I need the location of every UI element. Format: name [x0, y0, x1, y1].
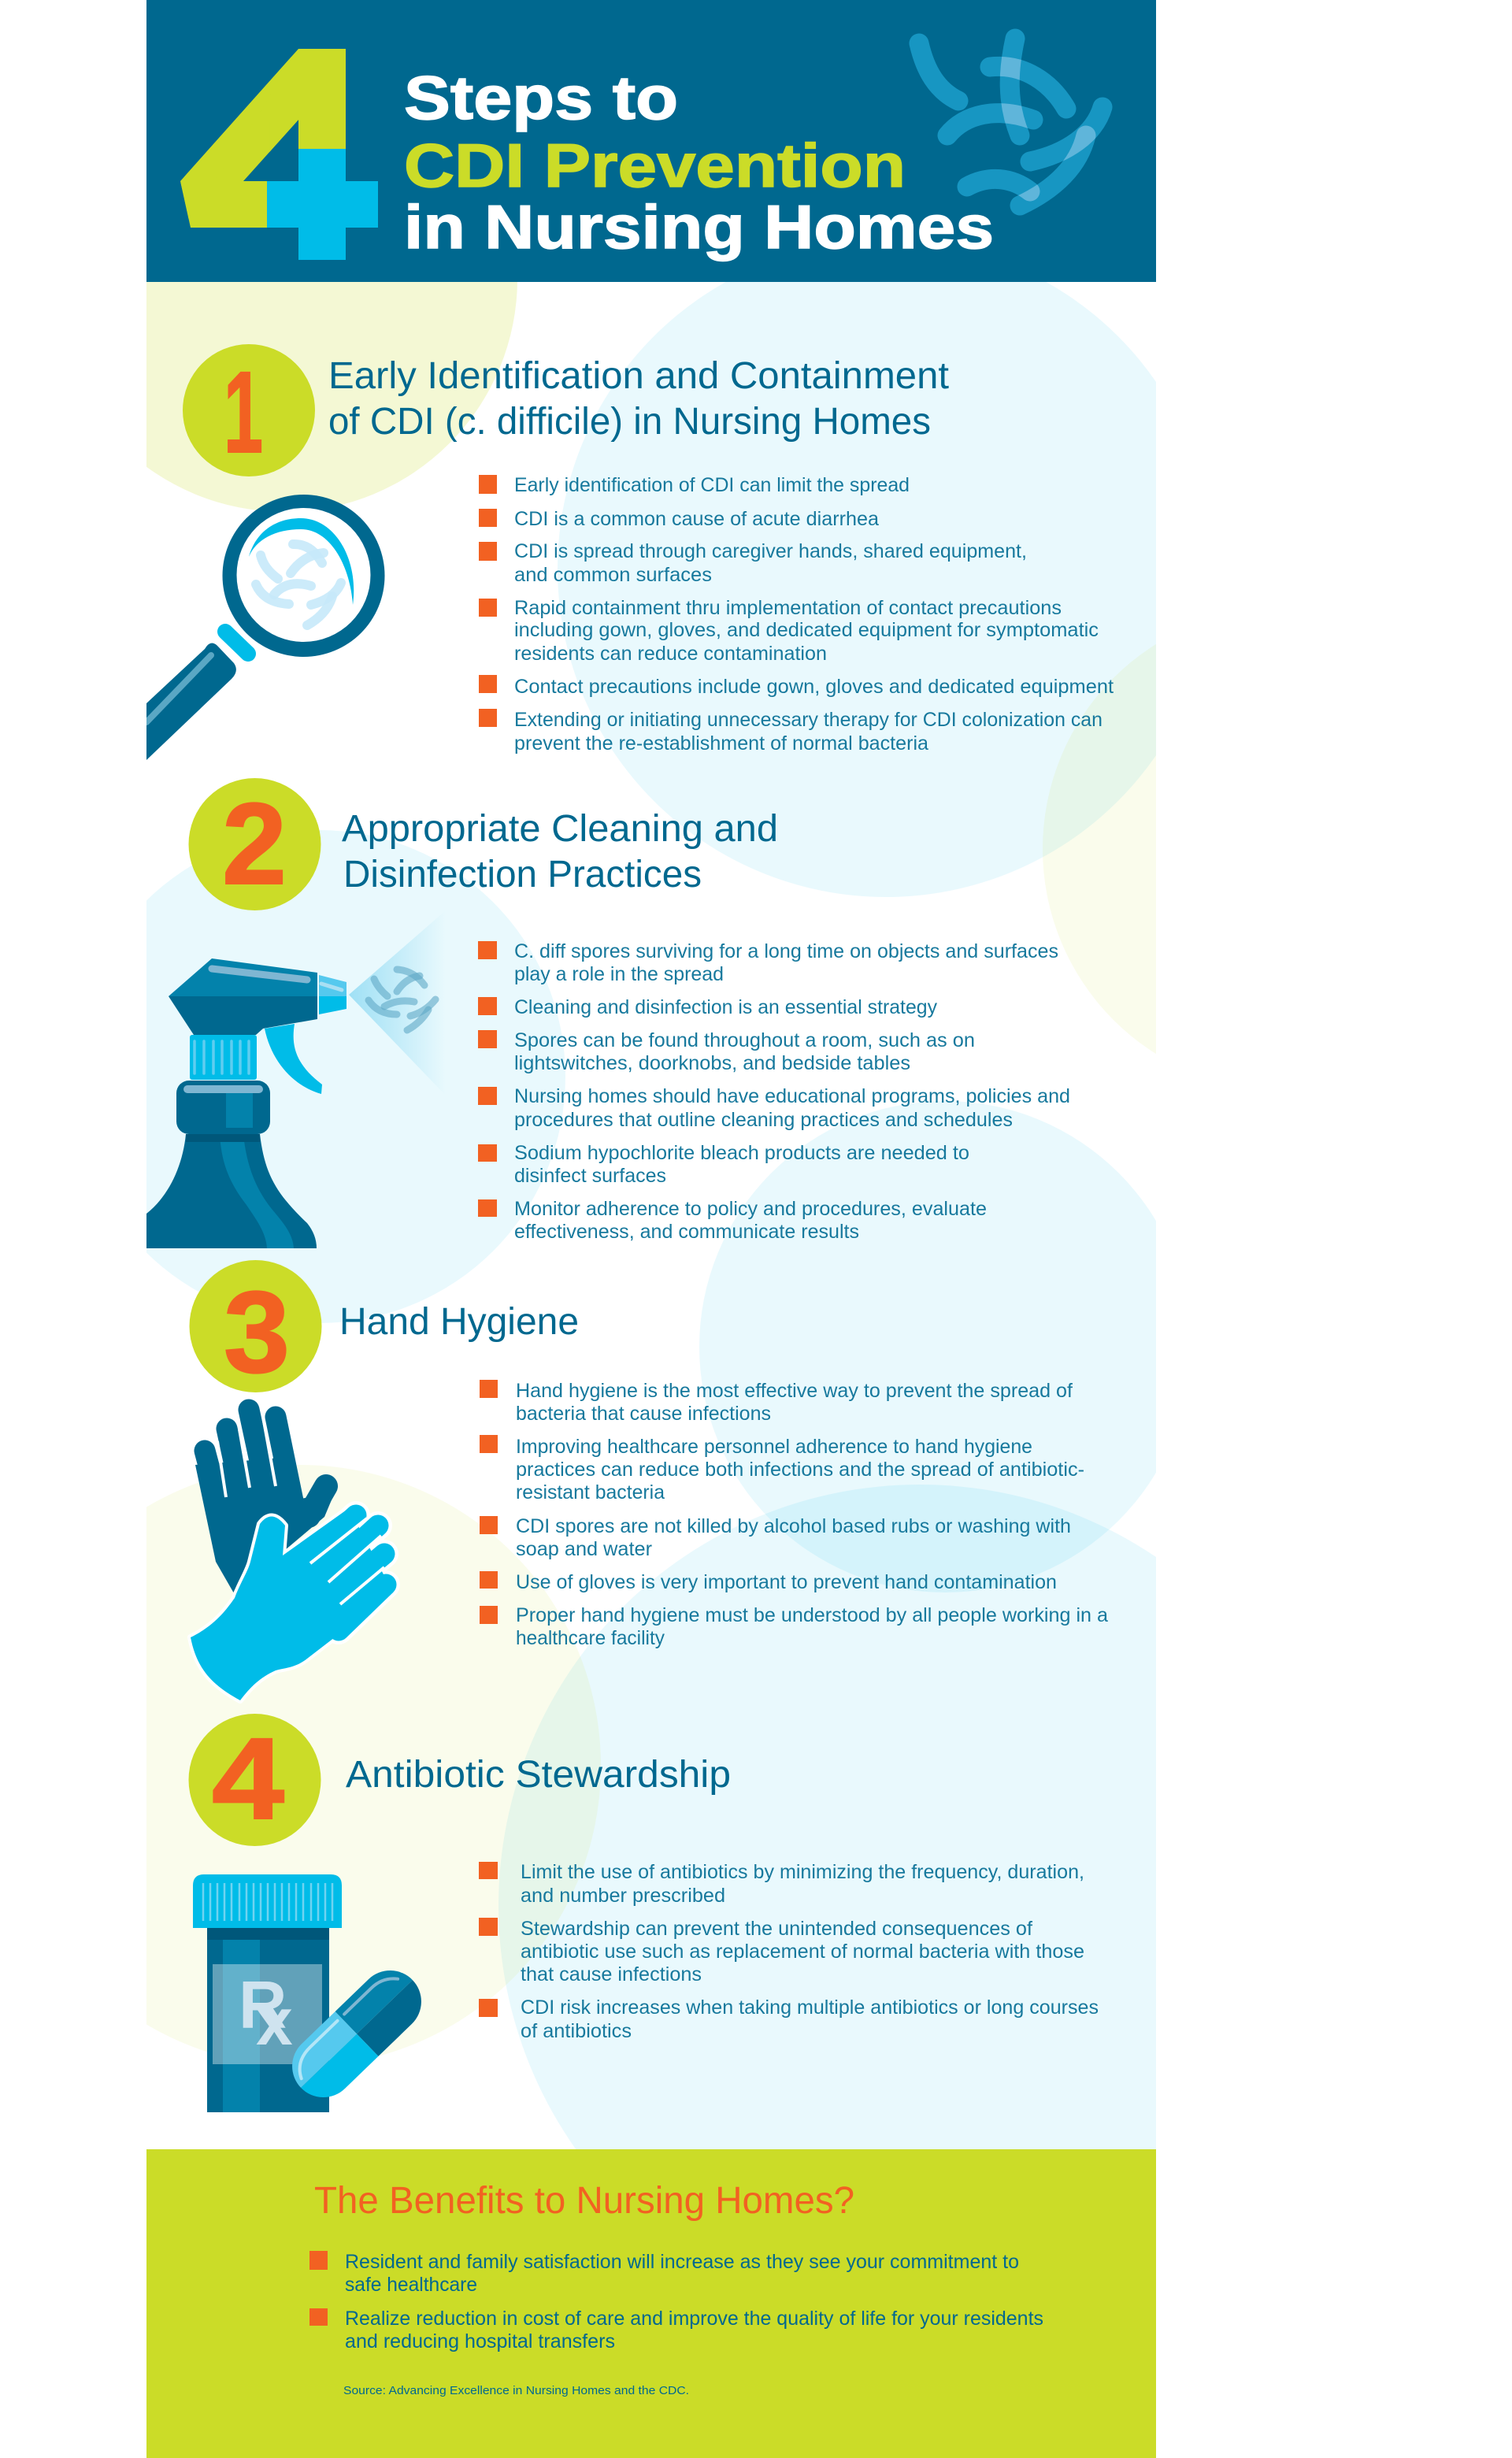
title: Steps to [404, 63, 678, 132]
section 2 [146, 778, 1070, 1248]
icon: header bacteria [919, 39, 1102, 206]
bullet list 3: bacteria that cause infections [516, 1403, 771, 1425]
icon: pill bottle and capsule: x [256, 1985, 293, 2059]
bullet list 1: residents can reduce contamination [514, 643, 827, 665]
icon: pill bottle and capsule: R [239, 1968, 287, 2043]
bullet list 4: Stewardship can prevent the unintended consequences of [521, 1918, 1032, 1940]
benefits list [309, 2251, 1043, 2352]
bullet list 2: Nursing homes should have educational programs, policies and [514, 1085, 1070, 1107]
heading 2: Appropriate Cleaning and [342, 808, 778, 850]
bullet list 4: that cause infections [521, 1963, 702, 1985]
bullet list 1: prevent the re-establishment of normal bacteria [514, 732, 928, 754]
bullet list 3: Use of gloves is very important to prevent hand contamination [516, 1571, 1057, 1593]
background circles [146, 282, 1156, 2149]
bullet list 3: healthcare facility [516, 1627, 665, 1649]
source note: Source: Advancing Excellence in Nursing Homes and the CDC. [343, 2384, 689, 2397]
number badge 1: 1 [224, 348, 263, 477]
bullet list 2: lightswitches, doorknobs, and bedside tables [514, 1052, 910, 1074]
bullet list 4: and number prescribed [521, 1885, 725, 1907]
number badge 4 [189, 1714, 321, 1846]
bullet list 3: soap and water [516, 1538, 652, 1560]
big number four with plus sign [180, 49, 378, 260]
infographic [146, 0, 1156, 2458]
bullet list 4: of antibiotics [521, 2020, 632, 2042]
bullet list 1: including gown, gloves, and dedicated equipment for symptomatic [514, 619, 1099, 641]
heading 2 [342, 808, 778, 895]
bullet list 4 [479, 1861, 1099, 2042]
bullet list 2: Spores can be found throughout a room, such as on [514, 1029, 975, 1051]
number badge 1 [183, 344, 315, 477]
header banner [146, 0, 1156, 282]
icon: hands with glove [191, 1410, 393, 1700]
title: in Nursing Homes [404, 192, 994, 261]
section 4 [189, 1714, 1099, 2112]
bullet list 3: Hand hygiene is the most effective way to prevent the spread of [516, 1380, 1073, 1402]
section 1 [146, 344, 1114, 760]
bullet list 2: effectiveness, and communicate results [514, 1221, 859, 1243]
bullet list 1: Contact precautions include gown, gloves and dedicated equipment [514, 676, 1114, 698]
heading 1 [328, 355, 949, 443]
bullet list 3: resistant bacteria [516, 1481, 665, 1503]
number badge 2 [189, 778, 321, 910]
number badge 2: 2 [222, 780, 287, 909]
benefits list: Resident and family satisfaction will increase as they see your commitment to [345, 2251, 1019, 2273]
number badge 4: 4 [212, 1715, 284, 1844]
panel: benefits [146, 2149, 1156, 2458]
benefits heading: The Benefits to Nursing Homes? [314, 2180, 854, 2222]
bullet list 2 [478, 940, 1070, 1243]
bullet list 4: Limit the use of antibiotics by minimizing the frequency, duration, [521, 1861, 1084, 1883]
bullet list 1: Early identification of CDI can limit the spread [514, 474, 910, 496]
section 3 [189, 1260, 1108, 1700]
bullet list 1 [479, 474, 1114, 754]
heading 1: of CDI (c. difficile) in Nursing Homes [328, 401, 931, 443]
heading 4: Antibiotic Stewardship [346, 1754, 731, 1796]
benefits list: safe healthcare [345, 2274, 477, 2296]
icon: pill bottle and capsule [193, 1874, 434, 2112]
heading 3: Hand Hygiene [339, 1301, 579, 1343]
icon: spray bottle [146, 910, 446, 1248]
heading 1: Early Identification and Containment [328, 355, 949, 397]
bullet list 2: C. diff spores surviving for a long time on objects and surfaces [514, 940, 1058, 962]
bullet list 4: antibiotic use such as replacement of normal bacteria with those [521, 1941, 1084, 1963]
bullet list 3: Improving healthcare personnel adherence to hand hygiene [516, 1436, 1032, 1458]
number badge 3: 3 [224, 1268, 290, 1397]
bullet list 2: Sodium hypochlorite bleach products are needed to [514, 1142, 969, 1164]
bullet list 2: play a role in the spread [514, 963, 724, 985]
bullet list 1: CDI is spread through caregiver hands, shared equipment, [514, 540, 1027, 562]
bullet list 2: procedures that outline cleaning practices and schedules [514, 1109, 1013, 1131]
title: CDI Prevention [404, 131, 906, 200]
icon: magnifying glass [146, 495, 384, 760]
title [404, 63, 994, 261]
bullet list 3: Proper hand hygiene must be understood by all people working in a [516, 1604, 1108, 1626]
bullet list 3: CDI spores are not killed by alcohol based rubs or washing with [516, 1515, 1071, 1537]
number badge 3 [189, 1260, 321, 1397]
bullet list 1: Rapid containment thru implementation of contact precautions [514, 597, 1062, 619]
benefits list: and reducing hospital transfers [345, 2330, 615, 2352]
bullet list 2: Monitor adherence to policy and procedures, evaluate [514, 1198, 987, 1220]
bullet list 4: CDI risk increases when taking multiple antibiotics or long courses [521, 1996, 1099, 2019]
bullet list 1: and common surfaces [514, 564, 712, 586]
benefits list: Realize reduction in cost of care and improve the quality of life for your residents [345, 2308, 1043, 2330]
bullet list 1: Extending or initiating unnecessary therapy for CDI colonization can [514, 709, 1102, 731]
bullet list 2: disinfect surfaces [514, 1165, 666, 1187]
big number four with plus sign: 4 [172, 0, 339, 323]
bullet list 2: Cleaning and disinfection is an essential strategy [514, 996, 937, 1018]
bullet list 1: CDI is a common cause of acute diarrhea [514, 508, 879, 530]
heading 2: Disinfection Practices [343, 854, 702, 895]
bullet list 3 [480, 1380, 1108, 1649]
bullet list 3: practices can reduce both infections and the spread of antibiotic- [516, 1459, 1084, 1481]
